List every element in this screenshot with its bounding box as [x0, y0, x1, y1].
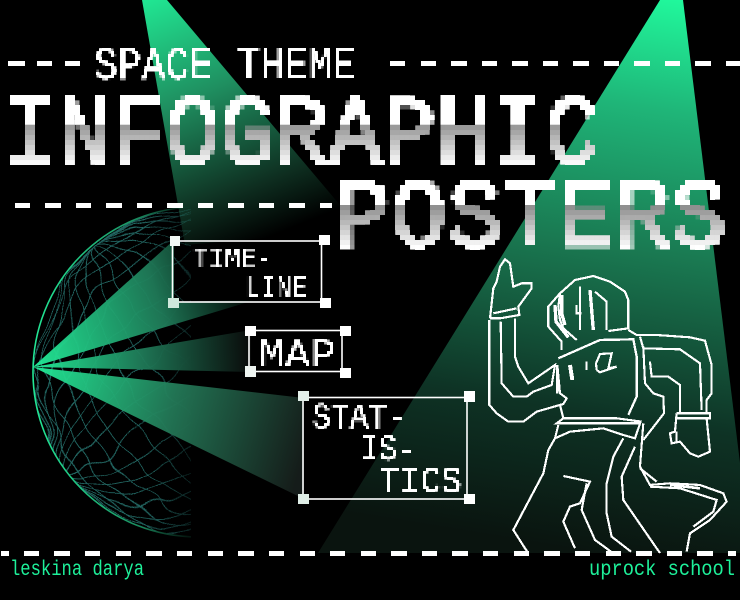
torso [558, 339, 637, 415]
light ray to timeline [33, 240, 255, 367]
raised glove [490, 259, 532, 318]
box: map [245, 326, 351, 380]
spotlight beam: right [318, 0, 740, 553]
credit: author: leskina darya [10, 559, 144, 582]
lower glove [677, 413, 710, 418]
subtitle: SPACE THEME [94, 41, 356, 93]
arm [489, 320, 567, 422]
label: statistics: STAT- [312, 398, 406, 439]
title line: infographic: INFOGRAPHIC [3, 82, 599, 193]
legs [513, 438, 555, 553]
label: map: MAP [259, 334, 336, 380]
helmet [548, 276, 628, 350]
label: statistics [312, 398, 462, 503]
light ray to statistics [33, 367, 304, 499]
dashed line: bottom [1, 551, 736, 556]
light ray to map [33, 330, 251, 372]
box: timeline [168, 235, 331, 308]
dashed line: top [8, 61, 740, 66]
chest panel [570, 365, 572, 380]
label: statistics: TICS [379, 462, 462, 503]
waist [643, 347, 664, 440]
label: statistics: IS- [361, 430, 415, 471]
astronaut [489, 259, 727, 553]
title line: posters: POSTERS [335, 165, 727, 276]
spotlight beam: top left [142, 0, 361, 245]
box: statistics [298, 391, 475, 504]
label: timeline: TIME- [193, 243, 272, 278]
label: timeline [193, 243, 307, 306]
dashed line: middle [15, 203, 332, 208]
label: timeline: LINE [245, 271, 307, 306]
wireframe hemisphere [32, 208, 191, 538]
